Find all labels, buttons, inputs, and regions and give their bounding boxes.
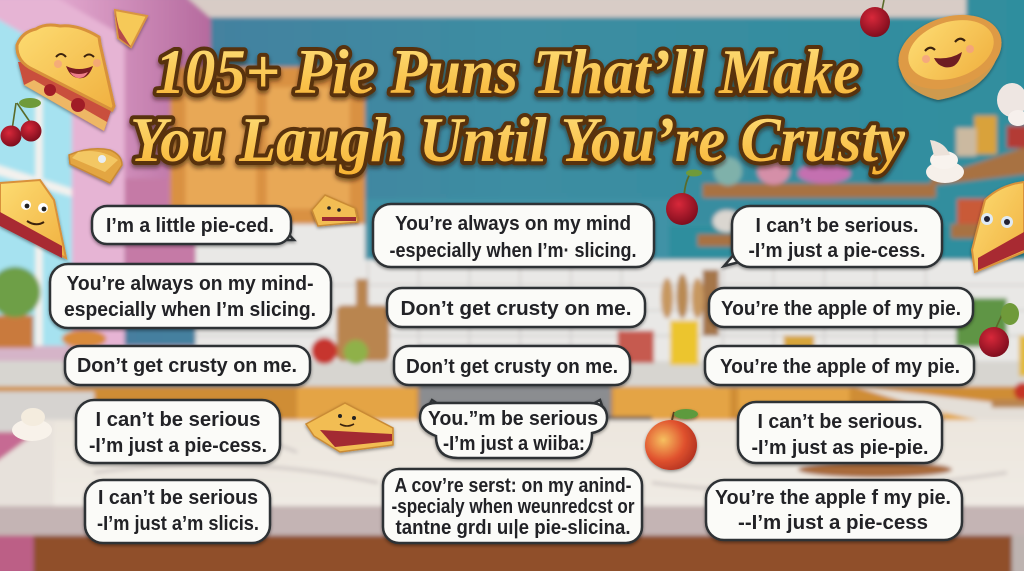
bubble: always on my mind, centre	[373, 204, 654, 267]
bubble: apple of my pie, right	[705, 346, 974, 385]
bubble: I'm a little pie-ced	[92, 206, 294, 244]
bubble: always on my mind, centre: You’re always on my mind	[395, 213, 631, 235]
icon: whipped cream top right	[997, 83, 1024, 126]
bubble: garbled serious, centre	[420, 400, 607, 458]
title: You Laugh Until You’re Crusty	[130, 105, 906, 175]
bubble: slicis, left: I can’t be serious	[98, 487, 258, 509]
bubble: pie-pie, right	[738, 402, 942, 463]
icon: cherry right	[979, 303, 1019, 357]
bubble: pie-pie, right: -I’m just as pie-pie.	[752, 437, 928, 459]
bubble: pie-cess, left	[76, 400, 280, 463]
bubble: apple of my pie, right: You’re the apple of my pie.	[720, 356, 960, 378]
bubble: pie-cess, right: I can’t be serious.	[756, 215, 918, 237]
bubble: garbled three lines, centre: A cov’re serst: on my anind-	[394, 475, 632, 497]
icon: cherry centre	[666, 170, 702, 225]
bubble: garbled three lines, centre: tantne grdı uı|e pie-slicina.	[396, 517, 630, 539]
bubble: apple f my pie, right	[706, 480, 962, 540]
bubble: garbled serious, centre: -I’m just a wiiba:	[443, 433, 585, 455]
bubble: slicis, left	[85, 480, 270, 543]
title: 105+ Pie Puns That’ll Make	[155, 37, 860, 107]
bubble: don't get crusty, left	[65, 346, 310, 385]
icon: apple	[645, 409, 698, 470]
bubble: apple of my pie, right top	[709, 288, 973, 327]
icon: small pie slice left	[69, 149, 122, 183]
bubble: don't get crusty, centre	[394, 346, 630, 385]
icon: whipped cream left	[12, 408, 52, 441]
bubble: always on my mind, left	[50, 264, 331, 328]
icon: small pie wedge top	[115, 10, 147, 47]
bubble: I'm a little pie-ced: I’m a little pie-ced.	[106, 215, 274, 237]
bubble: don't get crusty, centre top: Don’t get crusty on me.	[400, 298, 632, 320]
bubble: apple f my pie, right: You’re the apple f my pie.	[715, 487, 951, 509]
icon: pie slice near first column	[312, 195, 358, 226]
bubble: apple f my pie, right: --I’m just a pie-cess	[738, 512, 928, 534]
icon: laughing round pie top right	[889, 2, 1011, 102]
bubble: don't get crusty, centre: Don’t get crusty on me.	[406, 356, 618, 378]
icon: pie slice with eyes left	[0, 180, 66, 258]
bubble: don't get crusty, centre top	[387, 288, 645, 327]
bubble: always on my mind, centre: -especially when I’m· slicing.	[390, 240, 636, 262]
bubble: always on my mind, left: especially when I’m slicing.	[64, 299, 316, 321]
bubble: garbled three lines, centre	[383, 469, 642, 543]
bubble: don't get crusty, left: Don’t get crusty on me.	[77, 355, 297, 377]
title	[130, 37, 906, 175]
icon: laughing pie slice top left	[17, 25, 114, 131]
bubble: pie-cess, right: -I’m just a pie-cess.	[748, 240, 926, 262]
bubble: pie-cess, left: -I’m just a pie-cess.	[89, 435, 267, 457]
bubble: apple of my pie, right top: You’re the apple of my pie.	[721, 298, 961, 320]
bubble: pie-cess, left: I can’t be serious	[96, 409, 260, 431]
bubble: garbled three lines, centre: -specialy when weunredcst or	[392, 496, 635, 518]
bubble: pie-cess, right	[724, 206, 942, 267]
icon: pie slice with eyes right	[972, 182, 1024, 272]
bubble: slicis, left: -I’m just a’m slicis.	[97, 513, 259, 535]
icon: pie slice on counter	[306, 403, 393, 452]
bubble: pie-pie, right: I can’t be serious.	[758, 411, 922, 433]
bubble: always on my mind, left: You’re always on my mind-	[66, 273, 314, 295]
bubble: garbled serious, centre: You.”m be serious	[428, 408, 598, 430]
icon: whipped cream right	[926, 140, 964, 183]
icon: cherry top right	[860, 0, 890, 37]
icon: cherries left	[0, 98, 42, 146]
